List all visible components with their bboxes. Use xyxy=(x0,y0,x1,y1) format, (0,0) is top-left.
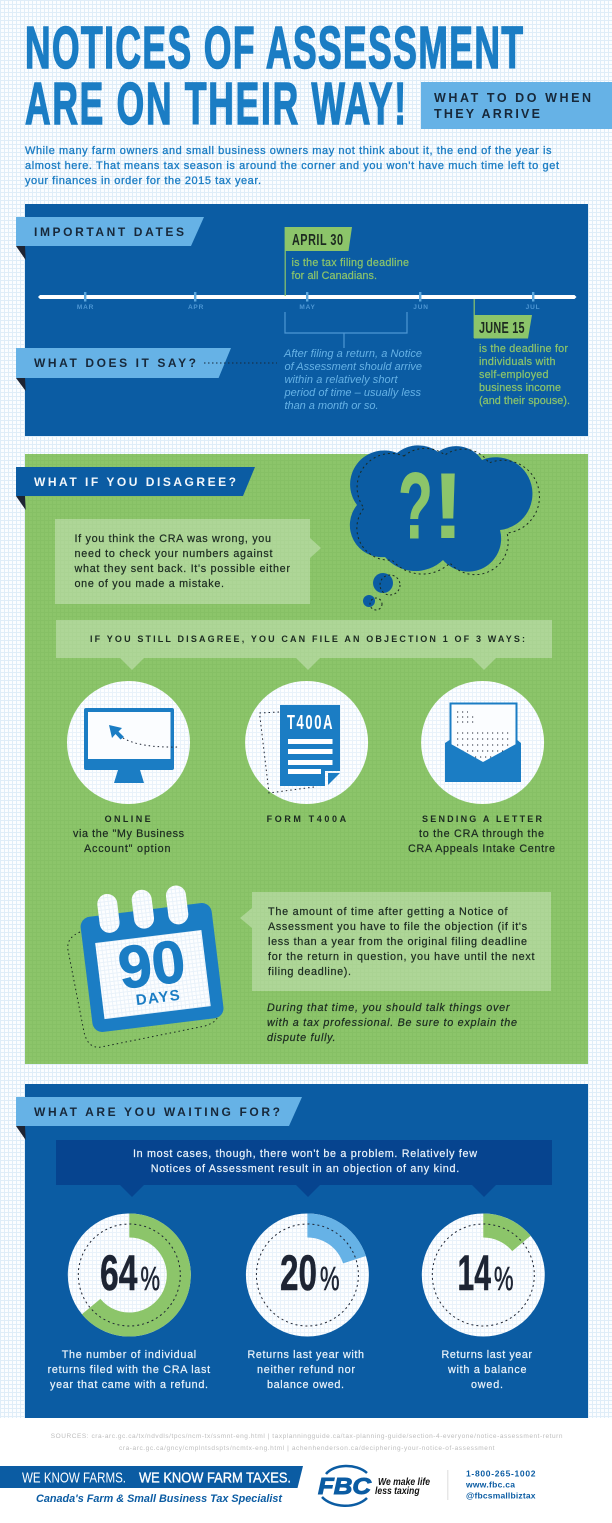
banner: few objections: Notices of Assessment result in an objection of any kind. xyxy=(151,1163,459,1175)
title: ARE ON THEIR WAY! xyxy=(25,72,406,137)
caption: refund: returns filed with the CRA last xyxy=(48,1364,210,1376)
notice timing text: of Assessment should arrive xyxy=(284,361,422,373)
callout: 90 days explanation: filing deadline). xyxy=(268,966,351,978)
ribbon: what if you disagree xyxy=(16,467,255,510)
donut chart: 14%: % xyxy=(494,1260,514,1297)
logo: FBC: FBC xyxy=(318,1473,371,1499)
sources: SOURCES: cra-arc.gc.ca/tx/ndvdls/tpcs/ncm-tx/ssmnt-eng.html | taxplanningguide.ca/tax-planning-guide/section-4-everyone/notice-assessment-return xyxy=(51,1433,563,1440)
donut chart: 20%: % xyxy=(320,1260,340,1297)
flag: june 15: individuals with xyxy=(479,356,556,368)
callout: check your numbers xyxy=(55,519,321,604)
flag: june 15: business income xyxy=(479,382,561,394)
caption: neither xyxy=(248,1349,364,1391)
flag: april 30: is the tax filing deadline xyxy=(292,257,409,269)
panel: important dates xyxy=(16,204,588,436)
flag: april 30: APRIL 30 xyxy=(292,231,343,248)
icon: monitor xyxy=(84,708,180,783)
intro text: While many farm owners and small business owners may not think about it, the end of the year is xyxy=(25,145,552,157)
banner: few objections xyxy=(56,1140,552,1197)
callout: check your numbers: If you think the CRA was wrong, you xyxy=(74,533,271,545)
icon: thought cloud: ? xyxy=(398,454,433,559)
banner: few objections: In most cases, though, there won't be a problem. Relatively few xyxy=(133,1148,477,1160)
title xyxy=(25,16,523,137)
notice timing text: than a month or so. xyxy=(284,400,378,412)
logo: FBC: We make life xyxy=(378,1477,430,1488)
timeline: APR xyxy=(188,304,204,311)
ribbon: what are you waiting for: WHAT ARE YOU WAITING FOR? xyxy=(34,1105,280,1119)
icon: calendar 90 days xyxy=(68,882,225,1047)
option: online: via the "My Business xyxy=(73,828,185,840)
donut chart: 64%: 64 xyxy=(100,1245,138,1301)
advice text: During that time, you should talk things over xyxy=(267,1002,510,1014)
option: sending a letter: to the CRA through the xyxy=(419,828,544,840)
timeline: MAY xyxy=(299,304,316,311)
footer banner: WE KNOW FARMS. xyxy=(22,1470,126,1487)
ribbon: what does it say xyxy=(16,348,277,391)
flag: june 15 xyxy=(474,299,570,407)
donut chart: 64% xyxy=(68,1214,191,1336)
caption: balance owed: Returns last year xyxy=(442,1349,532,1361)
intro text xyxy=(25,145,559,187)
donut chart: 64%: % xyxy=(140,1260,160,1297)
intro text: almost here. That means tax season is around the corner and you won't have much time left to get xyxy=(25,160,559,172)
panel: what are you waiting for xyxy=(16,1084,588,1418)
timeline: JUL xyxy=(526,304,540,311)
banner: file an objection: IF YOU STILL DISAGREE, YOU CAN FILE AN OBJECTION 1 OF 3 WAYS: xyxy=(90,634,525,644)
ribbon: what are you waiting for xyxy=(16,1097,302,1140)
callout: check your numbers: what they sent back. It's possible either xyxy=(74,563,290,575)
caption: balance owed xyxy=(442,1349,532,1391)
caption: refund xyxy=(48,1349,210,1391)
sources xyxy=(51,1433,563,1452)
notice timing text: After filing a return, a Notice xyxy=(283,348,422,360)
donut chart: 20% xyxy=(246,1214,369,1336)
callout: 90 days explanation: Assessment you have to file the objection (if it's xyxy=(268,921,528,933)
timeline: JUN xyxy=(413,304,429,311)
subtitle banner: WHAT TO DO WHEN xyxy=(434,91,591,105)
timeline xyxy=(38,292,576,311)
donut chart: 20%: 20 xyxy=(280,1245,317,1301)
intro text: your finances in order for the 2015 tax year. xyxy=(25,175,261,187)
contact details xyxy=(465,1469,536,1500)
notice timing text: period of time – usually less xyxy=(284,387,422,399)
notice timing text: within a relatively short xyxy=(284,374,398,386)
caption: balance owed: with a balance xyxy=(447,1364,526,1376)
caption: neither: neither refund nor xyxy=(257,1364,355,1376)
caption: balance owed: owed. xyxy=(471,1379,503,1391)
title: NOTICES OF ASSESSMENT xyxy=(25,16,523,81)
icon: calendar 90 days: DAYS xyxy=(135,987,181,1009)
ribbon: what does it say: WHAT DOES IT SAY? xyxy=(34,356,196,370)
callout: check your numbers: need to check your numbers against xyxy=(74,548,272,560)
bracket xyxy=(285,312,407,348)
callout: check your numbers: one of you made a mistake. xyxy=(74,578,224,590)
icon: thought cloud xyxy=(350,445,539,610)
icon: envelope and letter xyxy=(445,704,521,782)
footer tagline: Canada's Farm & Small Business Tax Specialist xyxy=(36,1493,283,1505)
flag: april 30: for all Canadians. xyxy=(292,270,377,282)
flag: april 30 xyxy=(285,227,409,296)
option: sending a letter: CRA Appeals Intake Centre xyxy=(408,843,555,855)
subtitle banner: THEY ARRIVE xyxy=(434,107,540,121)
option: online: ONLINE xyxy=(105,814,151,824)
caption: neither: balance owed. xyxy=(267,1379,344,1391)
contact details: @fbcsmallbiztax xyxy=(466,1490,536,1500)
donut chart: 14% xyxy=(422,1214,545,1336)
ribbon: important dates: IMPORTANT DATES xyxy=(34,225,184,239)
logo: FBC xyxy=(318,1466,430,1506)
callout: 90 days explanation: for the return in question, you have until the next xyxy=(268,951,534,963)
icon: form document: T400A xyxy=(287,711,332,734)
option: form t400a xyxy=(245,681,368,824)
footer banner xyxy=(0,1466,303,1488)
sources: cra-arc.gc.ca/gncy/cmplntsdspts/ncmtx-eng.html | achenhenderson.ca/deciphering-your-notice-of-assessment xyxy=(119,1445,495,1452)
donut chart: 14%: 14 xyxy=(458,1245,491,1301)
option: online: Account" option xyxy=(84,843,170,855)
callout: 90 days explanation xyxy=(240,892,551,991)
callout: 90 days explanation: The amount of time after getting a Notice of xyxy=(268,906,508,918)
notice timing text xyxy=(283,348,422,412)
flag: june 15: (and their spouse). xyxy=(479,395,570,407)
flag: june 15: is the deadline for xyxy=(479,343,568,355)
advice text: dispute fully. xyxy=(267,1032,336,1044)
option: online xyxy=(67,681,190,855)
option: form t400a: FORM T400A xyxy=(267,814,347,824)
footer banner: WE KNOW FARM TAXES. xyxy=(139,1470,291,1487)
icon: thought cloud: ! xyxy=(432,453,464,558)
subtitle banner xyxy=(421,82,612,129)
option: sending a letter: SENDING A LETTER xyxy=(422,814,542,824)
banner: file an objection xyxy=(56,620,552,670)
panel: what if you disagree xyxy=(16,445,588,1064)
caption: neither: Returns last year with xyxy=(248,1349,364,1361)
flag: june 15: JUNE 15 xyxy=(479,319,525,336)
ribbon: important dates xyxy=(16,217,204,260)
timeline: MAR xyxy=(77,304,94,311)
advice text xyxy=(267,1002,517,1044)
option: sending a letter xyxy=(408,681,555,855)
caption: refund: The number of individual xyxy=(62,1349,196,1361)
logo: FBC: less taxing xyxy=(375,1486,420,1497)
caption: refund: year that came with a refund. xyxy=(50,1379,208,1391)
contact details: 1-800-265-1002 xyxy=(466,1469,536,1479)
flag: june 15: self-employed xyxy=(479,369,548,381)
advice text: with a tax professional. Be sure to explain the xyxy=(267,1017,517,1029)
icon: calendar 90 days: 90 xyxy=(114,927,189,1002)
contact details: www.fbc.ca xyxy=(465,1480,515,1490)
icon: form document xyxy=(260,705,340,793)
callout: 90 days explanation: less than a year from the original filing deadline xyxy=(268,936,527,948)
ribbon: what if you disagree: WHAT IF YOU DISAGREE? xyxy=(34,475,236,489)
